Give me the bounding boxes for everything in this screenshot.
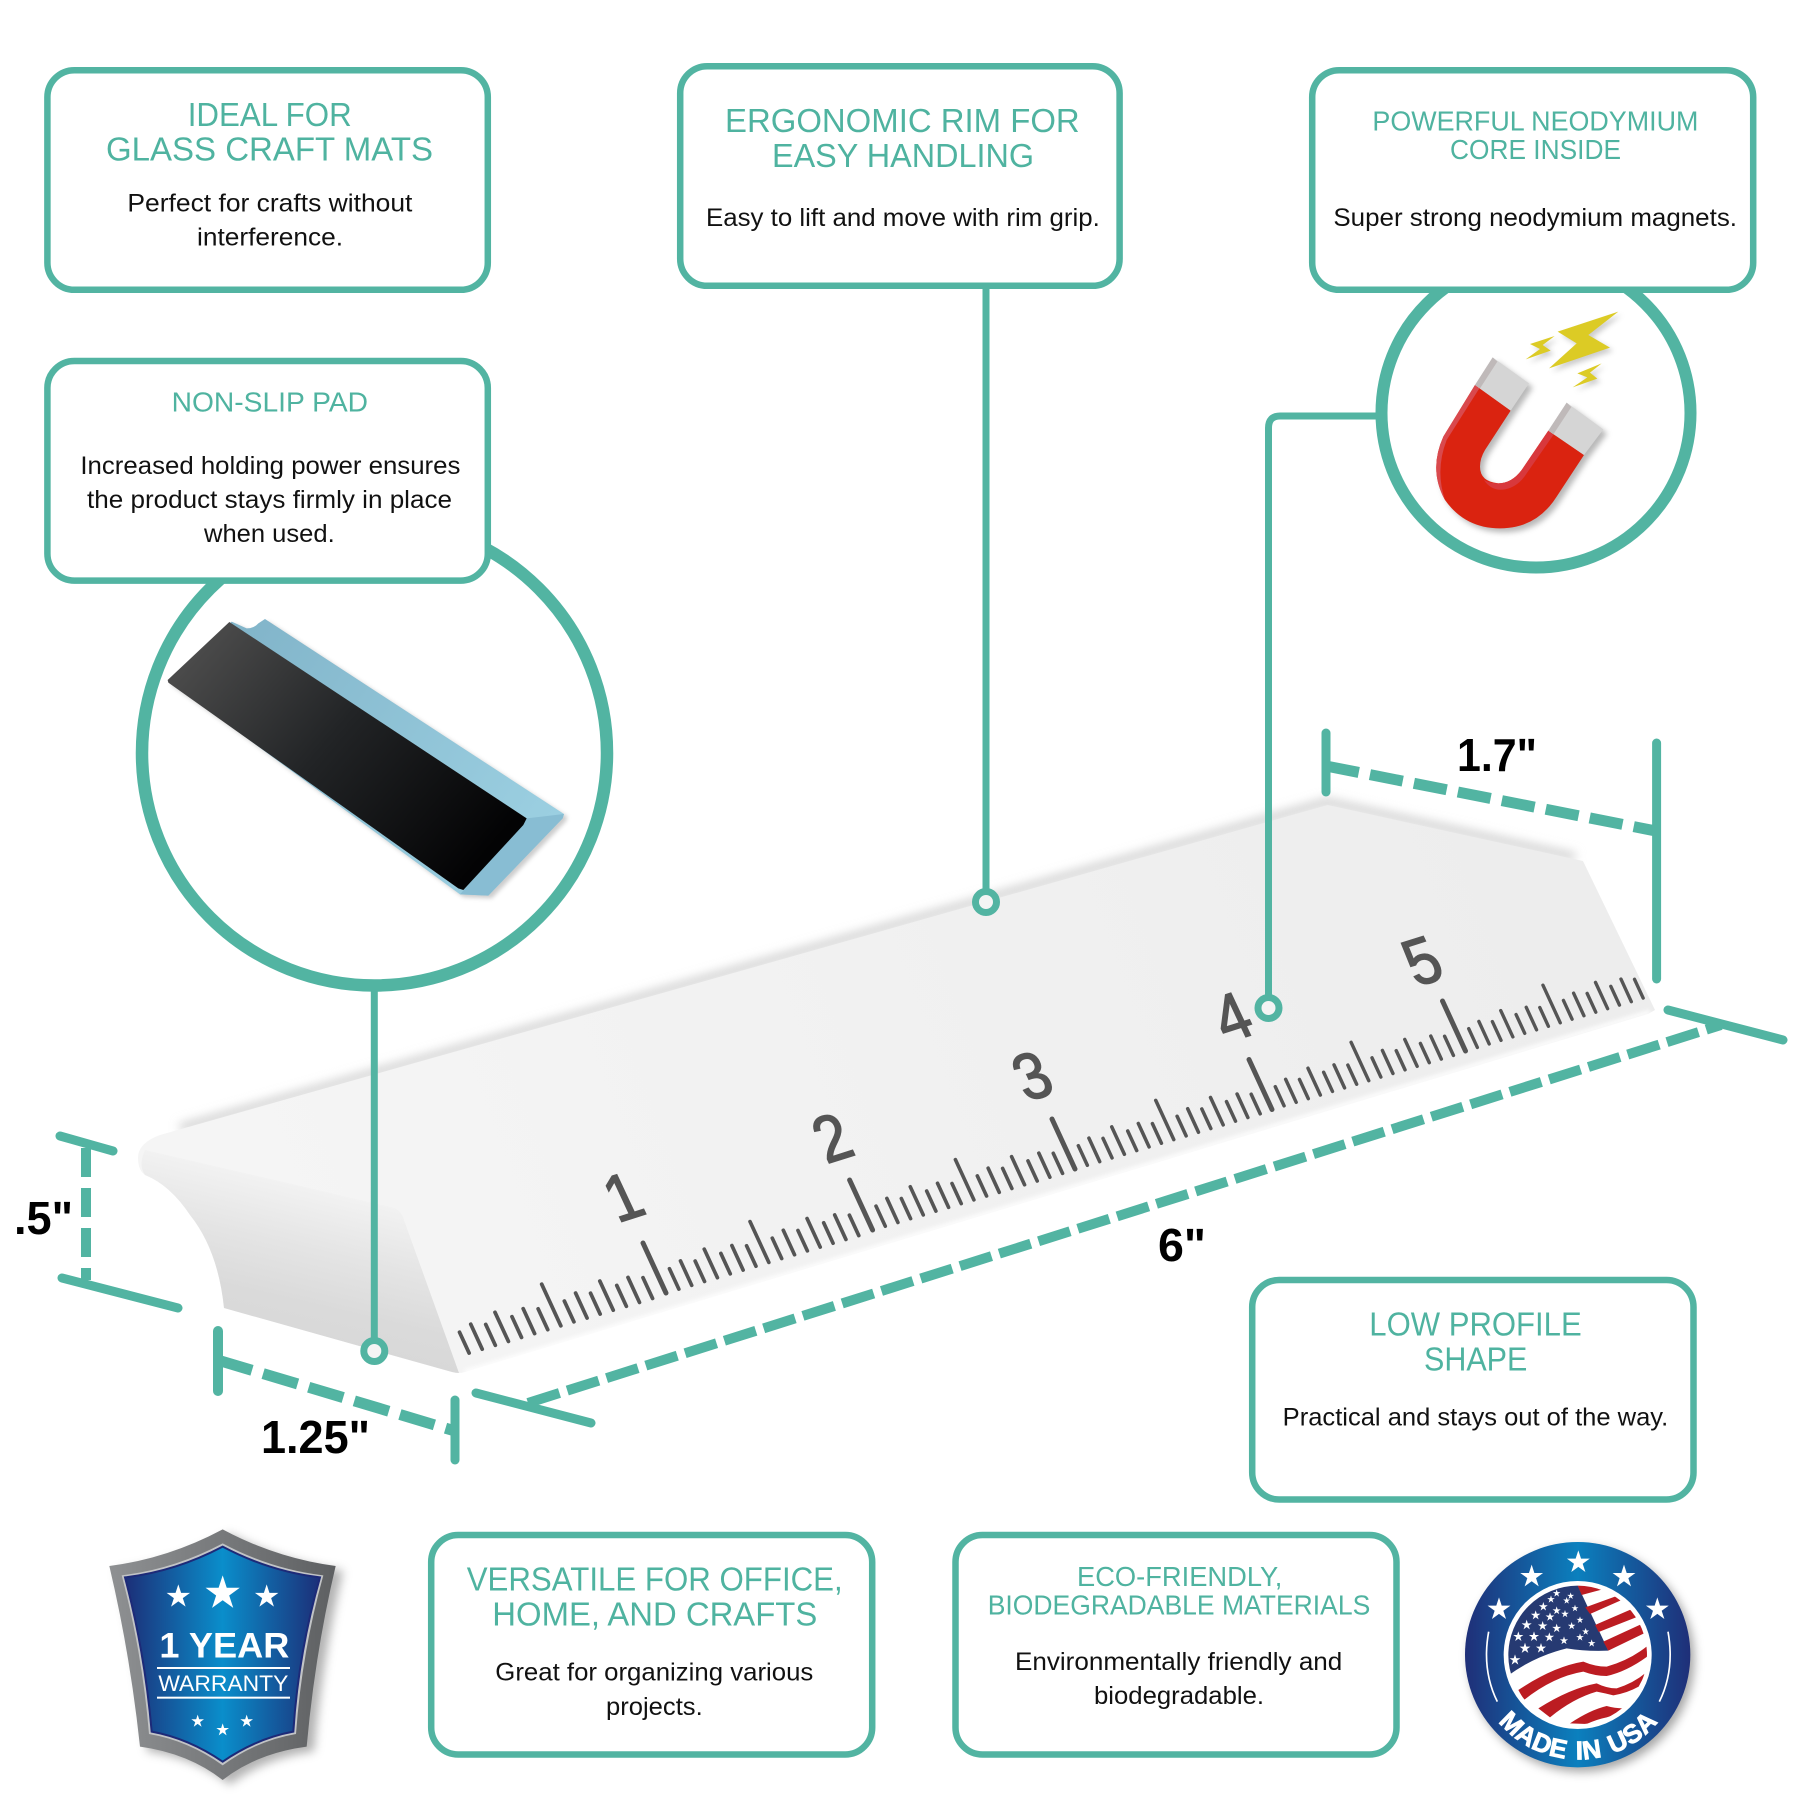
heading: SHAPE — [1424, 1341, 1527, 1378]
heading: LOW PROFILE — [1369, 1306, 1582, 1343]
heading: EASY HANDLING — [772, 137, 1034, 174]
ruler tick marks — [460, 979, 1643, 1353]
icon: lightning bolts — [1526, 312, 1618, 387]
image: pad underside — [168, 619, 564, 896]
ruler numerals: 4 — [1201, 979, 1264, 1056]
body text: projects. — [606, 1693, 703, 1721]
icon: horseshoe magnet — [1436, 357, 1603, 528]
body text — [80, 452, 460, 548]
dimension: height .5 inch — [14, 1136, 178, 1308]
ruler numerals — [592, 923, 1454, 1236]
circle: non-slip pad illustration — [142, 520, 607, 986]
badge: made in USA — [1463, 1540, 1700, 1778]
heading: ERGONOMIC RIM FOR — [725, 102, 1080, 139]
dimension: width 1.7 inch — [1326, 729, 1657, 979]
callout line: neodymium core — [1258, 416, 1380, 1018]
panel: ergonomic rim — [680, 66, 1120, 286]
body text — [1015, 1648, 1342, 1710]
heading: POWERFUL NEODYMIUM — [1372, 106, 1698, 136]
ruler numerals: 3 — [1001, 1038, 1064, 1115]
dimension: width 1.25 inch: 1.25" — [261, 1411, 370, 1463]
heading: BIODEGRADABLE MATERIALS — [988, 1589, 1370, 1620]
badge text: 1 YEAR — [159, 1627, 289, 1666]
body text: when used. — [203, 520, 335, 548]
panel: low profile shape — [1252, 1280, 1694, 1500]
body text: Easy to lift and move with rim grip. — [706, 204, 1100, 232]
body text — [495, 1659, 813, 1721]
heading: ECO-FRIENDLY, — [1077, 1561, 1282, 1592]
body text: Increased holding power ensures — [80, 452, 460, 480]
body text: Super strong neodymium magnets. — [1333, 204, 1737, 232]
flag — [1508, 1586, 1647, 1724]
dimension: length 6 inch — [476, 1010, 1783, 1423]
curved badge text: MADE IN USA — [1498, 1710, 1658, 1760]
heading: GLASS CRAFT MATS — [106, 131, 433, 168]
panel: ideal for glass craft mats — [47, 70, 488, 290]
panel: eco-friendly materials — [956, 1535, 1396, 1754]
callout line: ergonomic rim — [976, 285, 996, 912]
dimension: width 1.25 inch — [218, 1331, 455, 1463]
body text: the product stays firmly in place — [87, 486, 452, 514]
body text: interference. — [197, 224, 343, 252]
body text: Great for organizing various — [495, 1659, 813, 1687]
stars — [167, 1575, 278, 1735]
heading — [725, 102, 1080, 174]
body text: biodegradable. — [1094, 1682, 1264, 1710]
badge: 1 year warranty — [109, 1529, 336, 1780]
heading — [1372, 106, 1698, 165]
body text: Environmentally friendly and — [1015, 1648, 1342, 1676]
heading — [467, 1561, 843, 1633]
ruler numerals: 5 — [1391, 923, 1454, 1000]
heading — [1369, 1306, 1582, 1378]
body text: Practical and stays out of the way. — [1283, 1404, 1668, 1432]
ruler numerals: 2 — [801, 1100, 864, 1177]
heading: CORE INSIDE — [1450, 134, 1621, 165]
panel: versatile use — [431, 1535, 872, 1754]
panel: powerful neodymium core — [1312, 70, 1753, 290]
dimension: height .5 inch: .5" — [14, 1192, 73, 1244]
heading: NON-SLIP PAD — [172, 386, 368, 417]
heading: HOME, AND CRAFTS — [492, 1596, 817, 1633]
product: ruler — [138, 802, 1655, 1373]
body text — [127, 190, 412, 252]
body text: Perfect for crafts without — [127, 190, 412, 218]
heading — [106, 96, 433, 168]
dimension: length 6 inch: 6" — [1158, 1219, 1206, 1271]
heading: VERSATILE FOR OFFICE, — [467, 1561, 843, 1598]
dimension: width 1.7 inch: 1.7" — [1457, 729, 1537, 781]
circle: magnet illustration — [1382, 258, 1690, 568]
stars — [1488, 1550, 1669, 1619]
ruler numerals: 1 — [592, 1159, 655, 1236]
callout line: non-slip pad — [364, 985, 385, 1362]
heading: IDEAL FOR — [188, 96, 352, 133]
panel: non-slip pad — [47, 361, 488, 581]
badge text: WARRANTY — [158, 1671, 288, 1696]
canton stars — [1510, 1589, 1595, 1665]
heading — [988, 1561, 1370, 1620]
badge text — [157, 1627, 290, 1699]
